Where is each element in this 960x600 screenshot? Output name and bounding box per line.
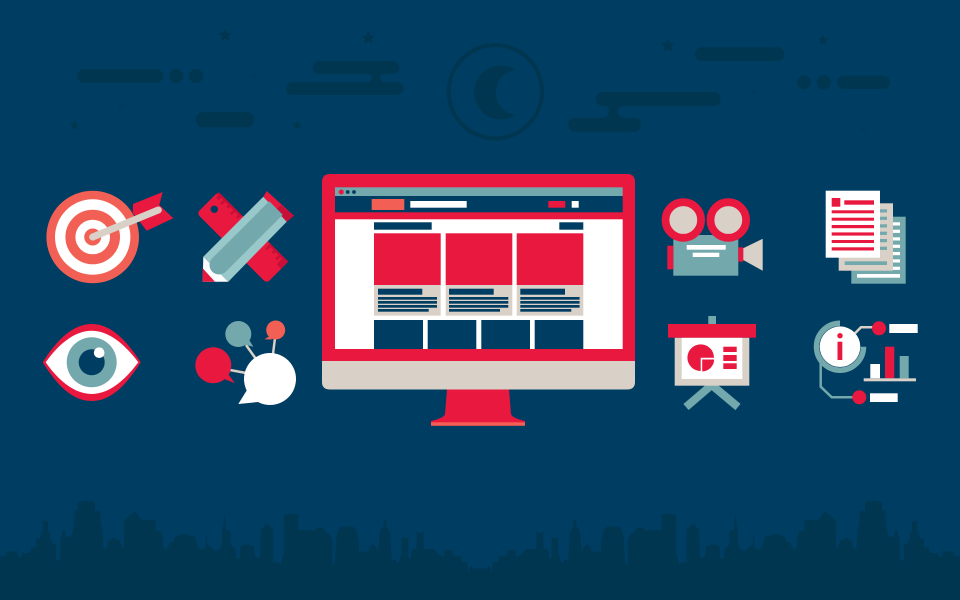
stars	[70, 28, 867, 132]
icon: target with arrow	[46, 191, 173, 283]
icon: ruler and pencil	[197, 191, 294, 283]
front page	[826, 191, 880, 258]
thumbnails row	[374, 320, 583, 349]
monitor stand	[431, 389, 525, 426]
monitor	[322, 174, 635, 426]
icon: presentation board	[668, 316, 756, 407]
card 2	[446, 233, 512, 316]
browser bar	[335, 187, 623, 196]
site header	[335, 196, 623, 212]
monitor foot	[431, 422, 525, 426]
middle page	[839, 203, 893, 271]
monitor red frame	[322, 174, 635, 361]
icon: film camera	[666, 202, 763, 276]
city skyline	[0, 500, 960, 600]
back page	[851, 217, 906, 284]
moon in ring	[449, 45, 542, 138]
icon: speech bubbles	[195, 320, 296, 405]
web page	[335, 219, 623, 349]
icon: eye	[43, 324, 141, 401]
night sky clouds	[77, 47, 890, 132]
card 1	[374, 233, 441, 316]
monitor beige chin	[322, 361, 635, 390]
card 3	[517, 233, 583, 316]
icon: documents stack	[826, 191, 906, 284]
icon: info and chart	[816, 321, 918, 404]
